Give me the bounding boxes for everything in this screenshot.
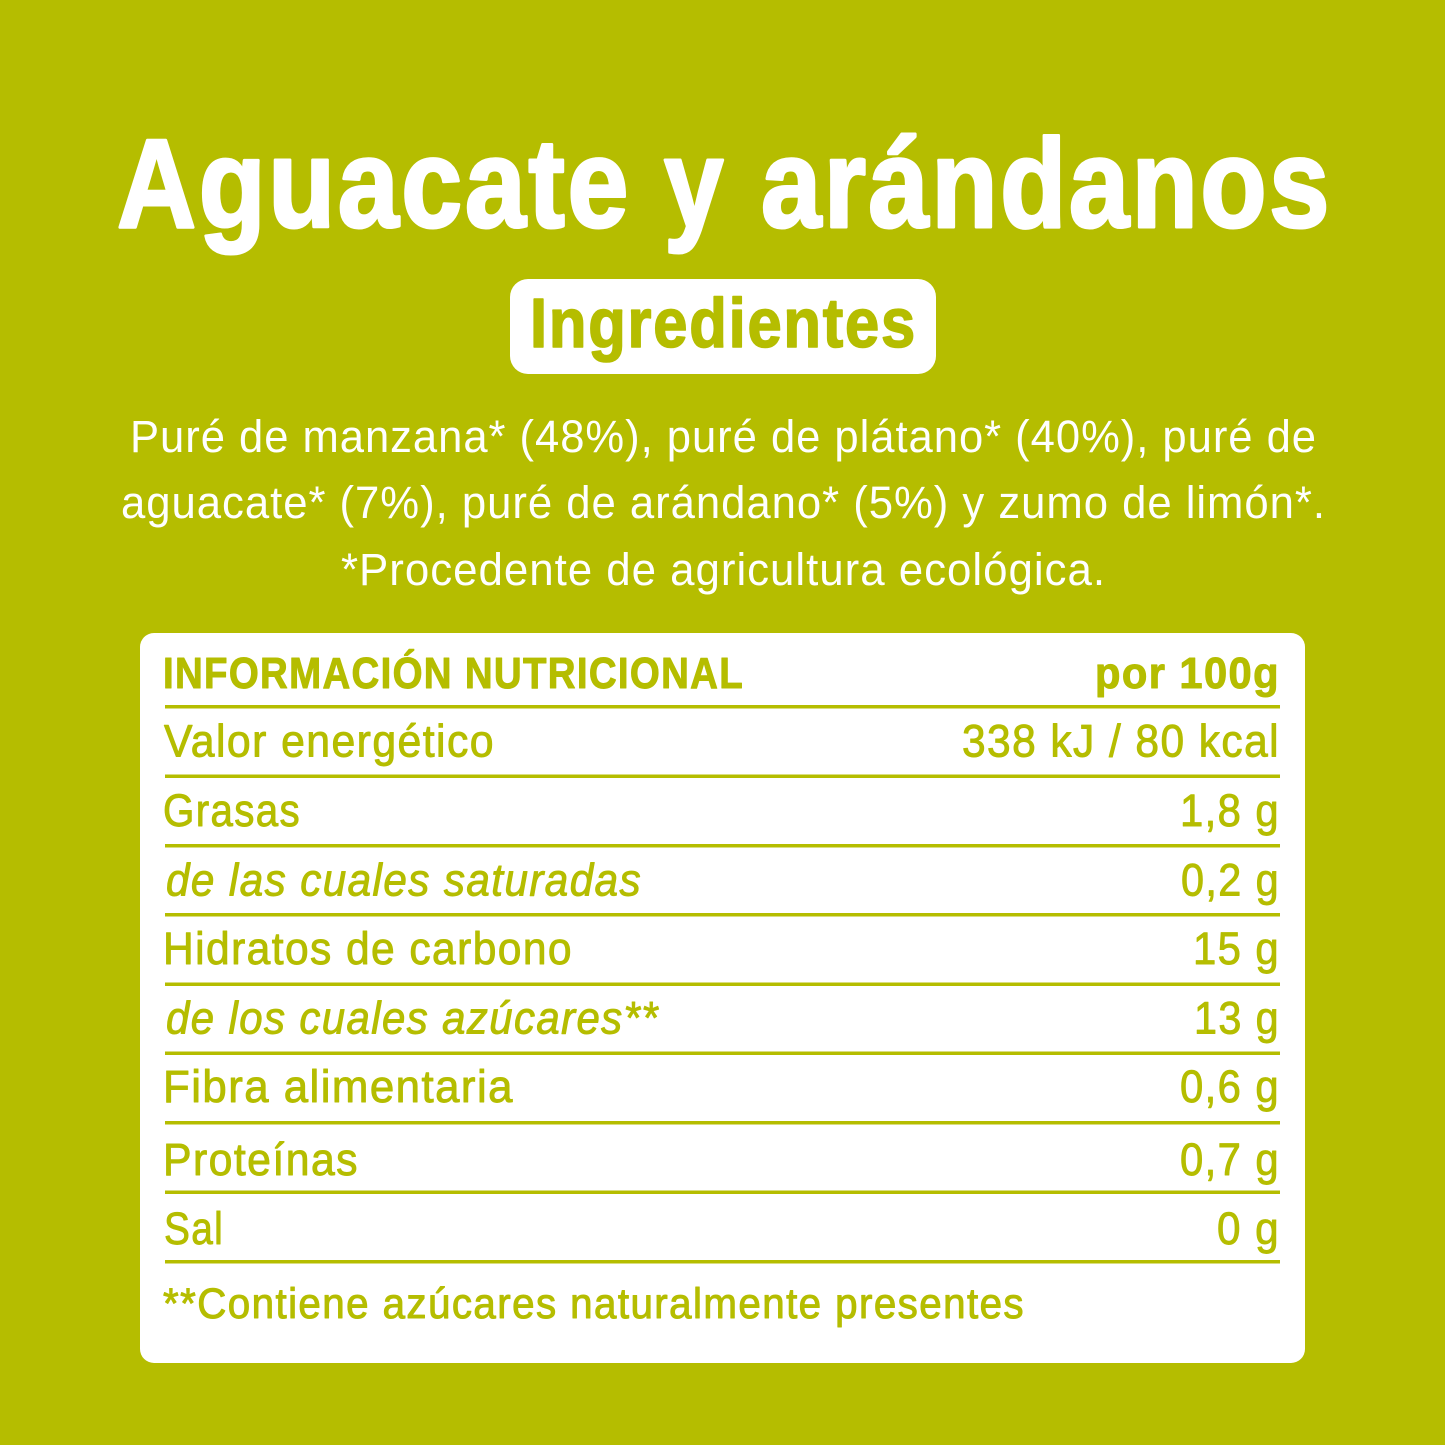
header row xyxy=(163,648,1280,698)
nutrition panel xyxy=(140,633,1305,1363)
ingredients text xyxy=(121,411,1326,595)
title xyxy=(117,113,1332,254)
title: arándanos xyxy=(761,113,1332,254)
title: Aguacate xyxy=(117,113,631,254)
ingredients badge: Ingredientes xyxy=(530,284,917,362)
row: grasas xyxy=(163,785,1280,836)
title: y xyxy=(664,113,726,254)
row: saturadas: 0,2 g xyxy=(1181,854,1280,906)
row: proteínas xyxy=(163,1134,1280,1185)
header row: INFORMACIÓN NUTRICIONAL xyxy=(163,648,744,698)
row: azúcares: 13 g xyxy=(1194,992,1280,1044)
row: fibra: 0,6 g xyxy=(1180,1061,1280,1112)
ingredients text: Puré de manzana* (48%), puré de plátano* (40%), puré de xyxy=(130,411,1317,462)
header row: por 100g xyxy=(1095,649,1280,698)
row: valor energético xyxy=(164,716,1280,766)
row: hidratos: Hidratos de carbono xyxy=(163,923,573,974)
row: grasas: Grasas xyxy=(163,785,301,836)
row: valor energético: 338 kJ / 80 kcal xyxy=(962,716,1280,766)
row: azúcares xyxy=(166,992,1280,1044)
row: grasas: 1,8 g xyxy=(1180,785,1280,836)
row: proteínas: Proteínas xyxy=(163,1134,359,1185)
footnote: **Contiene azúcares naturalmente presentes xyxy=(163,1280,1025,1328)
row: fibra xyxy=(163,1061,1280,1112)
row: azúcares: de los cuales azúcares** xyxy=(166,992,659,1044)
ingredients text: *Procedente de agricultura ecológica. xyxy=(341,544,1106,595)
row: hidratos: 15 g xyxy=(1193,923,1280,974)
ingredients text: aguacate* (7%), puré de arándano* (5%) y zumo de limón*. xyxy=(121,477,1326,528)
row: hidratos xyxy=(163,923,1280,974)
row: valor energético: Valor energético xyxy=(164,716,495,766)
row: saturadas: de las cuales saturadas xyxy=(166,854,642,906)
row: saturadas xyxy=(166,854,1280,906)
row: proteínas: 0,7 g xyxy=(1180,1134,1280,1185)
row: sal: 0 g xyxy=(1217,1203,1280,1254)
row: sal xyxy=(164,1203,1280,1254)
row: fibra: Fibra alimentaria xyxy=(163,1061,514,1112)
row: sal: Sal xyxy=(164,1203,224,1254)
